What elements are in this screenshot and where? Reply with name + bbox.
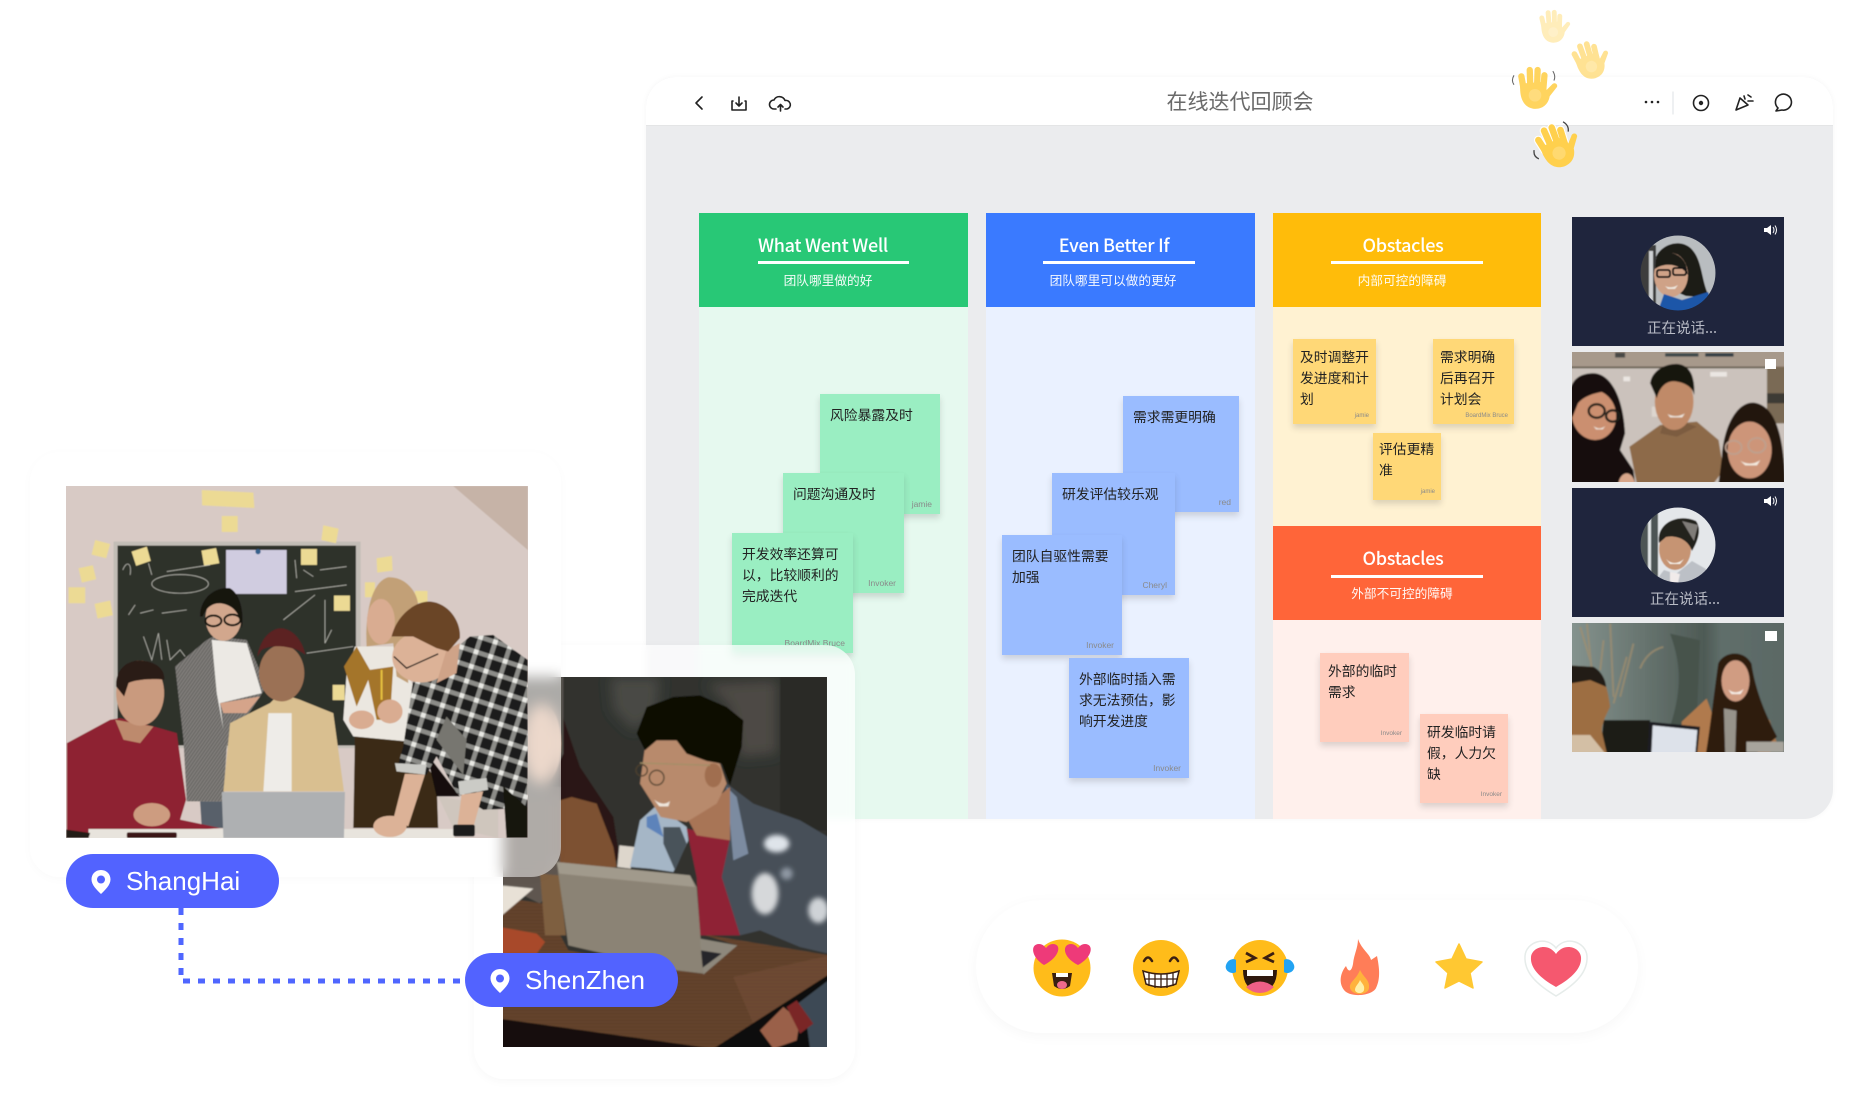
column: What Went Well — [699, 213, 968, 819]
sticky note blue 2 — [1052, 473, 1175, 595]
sticky note blue 4: 求无法预估，影 — [1079, 689, 1176, 709]
icon: laughing with tears emoji — [1226, 940, 1294, 996]
Shanghai card solid part — [30, 452, 474, 877]
column header yellow — [1273, 213, 1541, 307]
laptop and table — [89, 829, 455, 839]
Shenzhen card — [474, 645, 855, 1079]
sticky note green 3: 以，比较顺利的 — [742, 564, 839, 584]
camera icon — [1765, 359, 1776, 369]
sticky note yellow 3: 评估更精 — [1379, 438, 1434, 458]
column: Obstacles external — [1273, 526, 1541, 819]
column header blue — [986, 213, 1255, 307]
board title: 在线迭代回顾会 — [1166, 86, 1314, 116]
red tee — [687, 829, 740, 935]
sticky note blue 3 — [1002, 535, 1122, 655]
sticky note blue 1: red — [1219, 497, 1231, 507]
glasses — [640, 763, 710, 765]
column: Obstacles internal — [1273, 213, 1541, 526]
video tile 1: speaking avatar — [1572, 217, 1784, 346]
sticky note green 2: Invoker — [868, 578, 896, 588]
sticky note red 1: 外部的临时 — [1328, 660, 1397, 680]
avatar woman — [1640, 236, 1716, 310]
sticky note red 1: Invoker — [1381, 730, 1402, 737]
sticky note yellow 2: 计划会 — [1440, 388, 1481, 408]
sticky note green 3: 开发效率还算可 — [742, 543, 839, 563]
sticky note red 2: 研发临时请 — [1427, 721, 1496, 741]
sticky note blue 3: 团队自驱性需要 — [1012, 545, 1109, 565]
subheading: orange: 外部不可控的障碍 — [1351, 583, 1453, 602]
sticky note blue 3: Invoker — [1086, 640, 1114, 650]
Shenzhen photo — [494, 668, 827, 1047]
camera icon — [1765, 631, 1777, 641]
sticky note blue 4: 外部临时插入需 — [1079, 668, 1176, 688]
table — [500, 897, 830, 1049]
sticky note yellow 2: 需求明确 — [1440, 346, 1495, 366]
avatar man — [1640, 508, 1716, 582]
heading: Even Better If: Even Better If — [1059, 232, 1169, 258]
icon: heart eyes emoji — [1033, 940, 1091, 996]
sticky note yellow 1 — [1293, 339, 1376, 424]
sticky note green 2: 问题沟通及时 — [793, 483, 876, 503]
connector dotted line — [178, 908, 460, 984]
laptop — [557, 862, 703, 974]
toolbar background — [646, 77, 1833, 126]
sticky note blue 3: 加强 — [1012, 566, 1040, 586]
hand 2 — [1572, 39, 1614, 82]
main board window — [646, 77, 1833, 819]
sticky note blue 4: 响开发进度 — [1079, 710, 1148, 730]
sticky note yellow 3: jamie — [1421, 489, 1435, 495]
plaid man — [438, 796, 498, 838]
red sweater man — [67, 718, 220, 838]
sticky note green 3: 完成迭代 — [742, 585, 797, 605]
sticky note blue 2: Cheryl — [1142, 580, 1167, 590]
reaction bar — [976, 900, 1638, 1033]
speaking label: 正在说话... — [1647, 317, 1717, 338]
sticky note green 1: 风险暴露及时 — [830, 404, 913, 424]
hand 1 faint — [1541, 12, 1571, 43]
sticky note green 2 — [783, 473, 904, 593]
heading: What Went Well: What Went Well — [758, 232, 888, 258]
video tile 2: three people — [1572, 352, 1784, 482]
video tile 4: woman laughing — [1572, 623, 1784, 752]
icon: star — [1435, 943, 1483, 989]
sticky note red 2: Invoker — [1481, 791, 1502, 798]
heading: Obstacles internal: Obstacles — [1363, 232, 1443, 258]
sticky note green 1: jamie — [912, 499, 932, 509]
waving hands — [1512, 10, 1608, 168]
sticky note yellow 1: jamie — [1355, 413, 1369, 419]
video tile 3: speaking avatar — [1572, 488, 1784, 617]
sticky note blue 1: 需求需更明确 — [1133, 406, 1216, 426]
sticky note yellow 1: 划 — [1300, 388, 1314, 408]
sticky note blue 4: Invoker — [1153, 763, 1181, 773]
sticky note red 1: 需求 — [1328, 681, 1356, 701]
pill: ShenZhen: ShenZhen — [525, 965, 645, 995]
hand 3 — [1512, 70, 1557, 109]
chalk writing — [123, 560, 353, 660]
heading: Obstacles external: Obstacles — [1363, 545, 1443, 571]
sticky note red 2 — [1420, 714, 1508, 803]
sticky note blue 4 — [1069, 658, 1189, 778]
sticky note yellow 3 — [1373, 433, 1441, 500]
sticky note blue 1 — [1123, 396, 1239, 512]
sticky note yellow 3: 准 — [1379, 459, 1393, 479]
icon: location pin — [490, 969, 510, 993]
sticky note green 3 — [732, 533, 853, 653]
speaker icon — [1764, 496, 1777, 506]
sticky note yellow 2: 后再召开 — [1440, 367, 1495, 387]
sticky note green 3: BoardMix Bruce — [785, 638, 845, 648]
column header green — [699, 213, 968, 307]
pill: ShangHai — [66, 854, 279, 908]
pill: ShangHai: ShangHai — [126, 866, 240, 896]
pill: ShenZhen — [465, 953, 678, 1007]
sticky note yellow 2: BoardMix Bruce — [1465, 413, 1508, 419]
background woman — [558, 704, 620, 864]
sticky note yellow 2 — [1433, 339, 1514, 424]
icon: heart — [1524, 940, 1588, 997]
woman in gray coat — [200, 801, 223, 828]
sticky note yellow 1: 及时调整开 — [1300, 346, 1369, 366]
denim jacket — [717, 784, 828, 954]
sticky note red 2: 假，人力欠 — [1427, 742, 1496, 762]
column header orange — [1273, 526, 1541, 620]
sticky note green 1 — [820, 394, 940, 514]
icon: grinning emoji — [1133, 940, 1189, 996]
sticky note red 2: 缺 — [1427, 763, 1441, 783]
icon: location pin — [92, 870, 110, 894]
column: Even Better If — [986, 213, 1255, 819]
speaking label: 正在说话... — [1650, 588, 1720, 609]
sticky note blue 2: 研发评估较乐观 — [1062, 483, 1159, 503]
toolbar icons left — [695, 96, 792, 112]
Shanghai card translucent — [30, 452, 561, 877]
subheading: blue: 团队哪里可以做的更好 — [1050, 270, 1176, 289]
blonde woman — [353, 735, 438, 828]
toolbar icons right — [1644, 92, 1792, 114]
center man — [223, 693, 344, 791]
neck and face — [688, 787, 730, 840]
icon: fire emoji — [1340, 939, 1380, 996]
subheading: green: 团队哪里做的好 — [784, 270, 872, 289]
subheading: yellow: 内部可控的障碍 — [1358, 270, 1446, 289]
sticky note yellow 1: 发进度和计 — [1300, 367, 1369, 387]
hair — [637, 695, 743, 785]
sticky note red 1 — [1320, 653, 1409, 742]
hand 4 — [1527, 119, 1586, 175]
Shanghai photo — [66, 486, 528, 838]
speaker icon — [1764, 225, 1777, 235]
